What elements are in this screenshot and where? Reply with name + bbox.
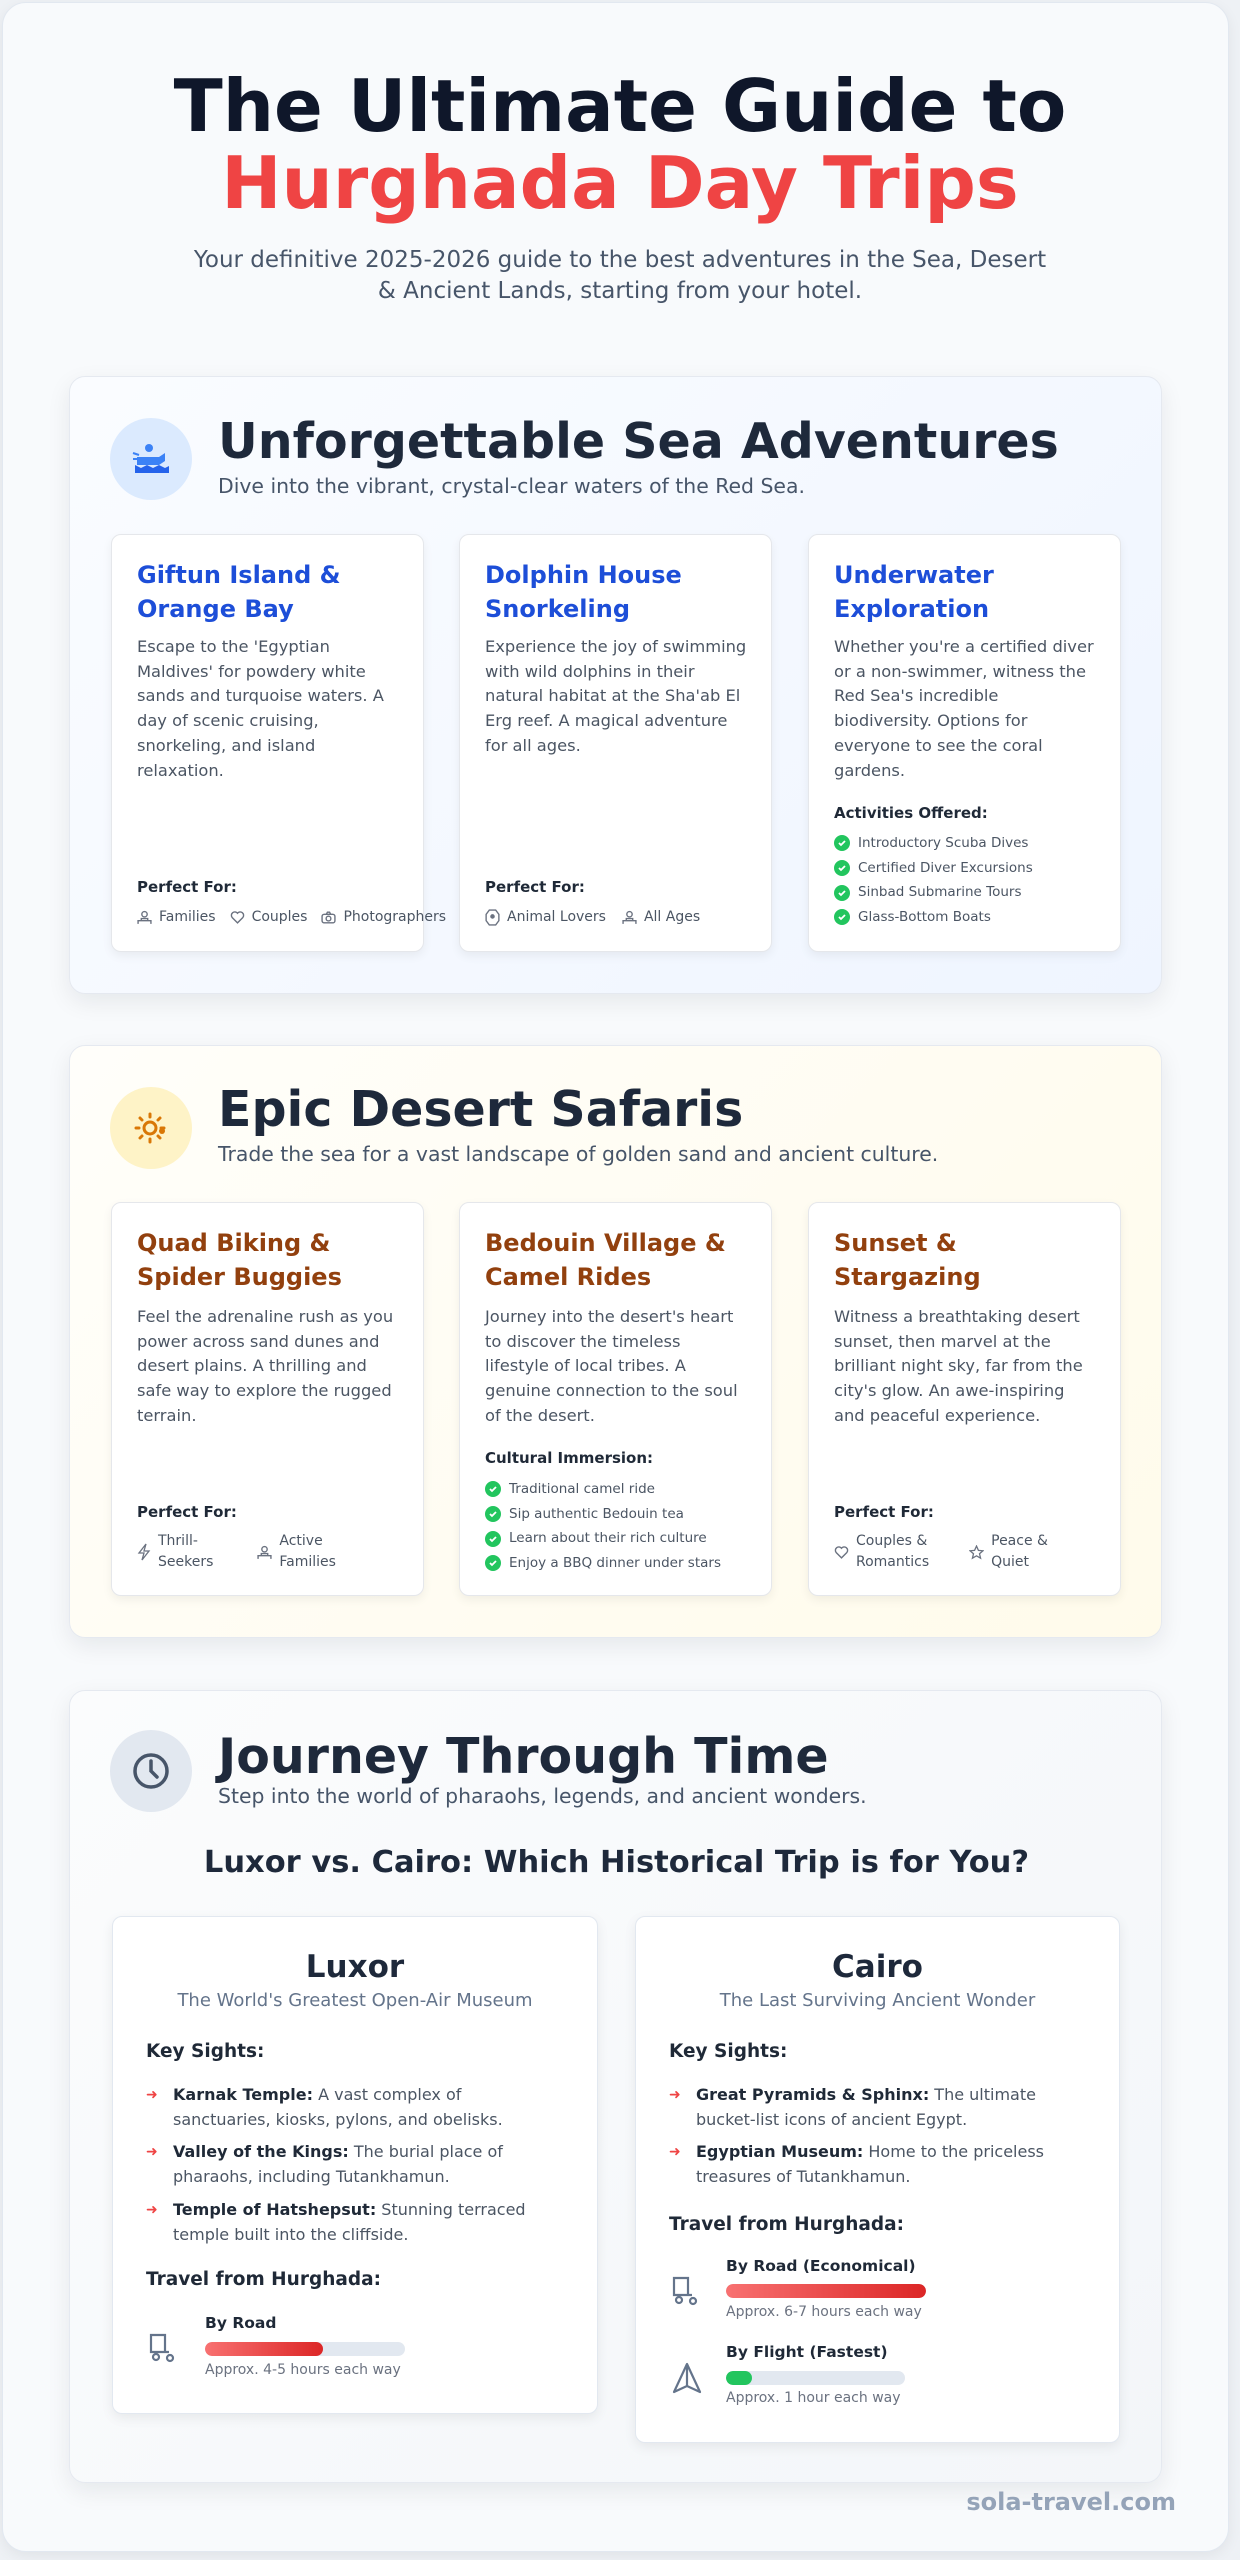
card: Sunset & Stargazing: Quiet — [991, 1554, 1029, 1570]
footer brand: sola-travel.com — [966, 2488, 1176, 2516]
sights list — [669, 2085, 1044, 2186]
travel: by road economical: Approx. 6-7 hours each way — [726, 2304, 922, 2320]
card: Luxor: Key Sights: — [146, 2041, 264, 2062]
sights list: ➜ — [146, 2144, 158, 2160]
card: Luxor: The World's Greatest Open-Air Museum — [177, 1990, 533, 2011]
heading: Unforgettable Sea Adventures — [218, 413, 1059, 470]
card: Cairo: The Last Surviving Ancient Wonder — [720, 1990, 1035, 2011]
sights list: ➜ — [669, 2144, 681, 2160]
card: Quad Biking: Feel the adrenaline rush as you power across sand dunes and desert plains. A thrilling and safe way to explore the rugged terrain. — [137, 1307, 393, 1425]
card: Cairo: Travel from Hurghada: — [669, 2214, 904, 2235]
card: Sunset & Stargazing: Sunset & Stargazing — [834, 1229, 981, 1291]
title: Hurghada Day Trips — [221, 141, 1019, 225]
card: Sunset & Stargazing: Witness a breathtaking desert sunset, then marvel at the brilliant night sky, far from the city's glow. An awe-inspiring — [834, 1307, 1083, 1400]
section subtitle: Dive into the vibrant, crystal-clear waters of the Red Sea. — [218, 474, 805, 498]
activities list: Sinbad Submarine Tours — [858, 884, 1022, 900]
title: The Ultimate Guide to — [174, 64, 1066, 148]
card: Sunset & Stargazing: Romantics — [856, 1554, 929, 1570]
card: Bedouin Village: Journey into the desert's heart to discover the timeless — [485, 1307, 733, 1351]
sights list: sanctuaries, kiosks, pylons, and obelisks. — [173, 2110, 503, 2128]
card: Underwater Exploration: biodiversity. Options for everyone to see the coral gardens. — [834, 711, 1043, 780]
card: Giftun Island: Escape to the 'Egyptian Maldives' for powdery white sands and turquoise waters. A day of scenic cruising, snorkeling, and island relaxation. — [137, 637, 384, 780]
card: Underwater Exploration — [808, 534, 1121, 952]
sights list: treasures of Tutankhamun. — [696, 2166, 910, 2186]
title — [174, 64, 1066, 225]
card: Dolphin House: All Ages — [644, 909, 700, 925]
sights list — [146, 2085, 526, 2244]
travel: by road: By Road — [205, 2314, 276, 2332]
activities list: Glass-Bottom Boats — [858, 909, 991, 925]
card: Quad Biking: Seekers — [158, 1554, 213, 1570]
card: Underwater Exploration: Underwater Exploration — [834, 561, 994, 623]
card: Giftun Island: Perfect For: — [137, 878, 237, 896]
heading: Epic Desert Safaris — [218, 1081, 743, 1138]
card: Bedouin Village: Bedouin Village & Camel Rides — [485, 1229, 726, 1291]
icon: clock — [110, 1730, 192, 1812]
card: Sunset & Stargazing: Perfect For: — [834, 1503, 934, 1521]
card: Bedouin Village: lifestyle of local tribes. A genuine connection to the soul of the desert. — [485, 1356, 738, 1425]
card: Cairo: Key Sights: — [669, 2041, 787, 2062]
sights list: temple built into the cliffside. — [173, 2224, 408, 2244]
card: Giftun Island: Families — [159, 909, 216, 925]
card: Giftun Island: Couples — [252, 909, 307, 925]
panel: journey through time — [69, 1690, 1162, 2483]
card: Quad Biking: Families — [279, 1554, 336, 1570]
card: Dolphin House — [459, 534, 772, 952]
subtitle: & Ancient Lands, starting from your hotel. — [378, 278, 862, 304]
travel: by road — [150, 2314, 405, 2378]
card: Quad Biking: Quad Biking & Spider Buggies — [137, 1229, 342, 1291]
travel: by road: Approx. 4-5 hours each way — [205, 2362, 401, 2378]
card: Giftun Island: Giftun Island & Orange Bay — [137, 561, 341, 623]
card: Dolphin House: Animal Lovers — [507, 909, 606, 925]
card: Luxor: Luxor — [306, 1949, 404, 1985]
sights list: pharaohs, including Tutankhamun. — [173, 2166, 450, 2186]
card: Cairo — [635, 1916, 1120, 2443]
sights list: Temple of Hatshepsut: Stunning terraced — [173, 2200, 526, 2219]
card: Sunset & Stargazing: and peaceful experience. — [834, 1406, 1040, 1425]
sights list: ➜ — [146, 2087, 158, 2103]
card: Giftun Island — [111, 534, 424, 952]
travel: by flight: Approx. 1 hour each way — [726, 2390, 901, 2406]
icon: swimmer — [110, 418, 192, 500]
subtitle: Your definitive 2025-2026 guide to the best adventures in the Sea, Desert — [194, 247, 1046, 273]
card: Dolphin House: Experience the joy of swimming with wild dolphins in their natural habitat at the Sha'ab El Erg reef. A magical adventure for all ages. — [485, 637, 746, 755]
card: Sunset & Stargazing: Peace & — [991, 1533, 1048, 1549]
card: Quad Biking — [111, 1202, 424, 1596]
card: Quad Biking: Active — [279, 1533, 323, 1549]
travel: by road economical: By Road (Economical) — [726, 2257, 916, 2275]
sights list: Valley of the Kings: The burial place of — [173, 2142, 503, 2161]
travel: by road economical — [672, 2257, 926, 2320]
card: Sunset & Stargazing — [808, 1202, 1121, 1596]
sights list: Egyptian Museum: Home to the priceless — [696, 2142, 1044, 2161]
activities list — [834, 835, 1033, 925]
section subtitle: Step into the world of pharaohs, legends, and ancient wonders. — [218, 1784, 867, 1808]
section subtitle: Trade the sea for a vast landscape of golden sand and ancient culture. — [218, 1142, 938, 1166]
sights list: Karnak Temple: A vast complex of — [173, 2085, 461, 2104]
icon: sun — [110, 1087, 192, 1169]
card: Bedouin Village: Cultural Immersion: — [485, 1449, 653, 1467]
comparison title: Luxor vs. Cairo: Which Historical Trip is for You? — [204, 1845, 1029, 1880]
card: Dolphin House: Dolphin House Snorkeling — [485, 561, 682, 623]
panel: desert safaris — [69, 1045, 1162, 1638]
travel: by flight: By Flight (Fastest) — [726, 2343, 888, 2361]
sights list: ➜ — [146, 2202, 158, 2218]
card: Quad Biking: Thrill- — [158, 1533, 198, 1549]
cultural list: Enjoy a BBQ dinner under stars — [509, 1555, 721, 1571]
sights list: Great Pyramids & Sphinx: The ultimate — [696, 2085, 1036, 2104]
card: Luxor: Travel from Hurghada: — [146, 2269, 381, 2290]
cultural list — [485, 1481, 721, 1571]
cultural list: Sip authentic Bedouin tea — [509, 1506, 684, 1522]
sights list: bucket-list icons of ancient Egypt. — [696, 2110, 967, 2128]
activities list: Introductory Scuba Dives — [858, 835, 1028, 851]
card: Sunset & Stargazing: Couples & — [856, 1533, 927, 1549]
card: Giftun Island: Photographers — [343, 909, 446, 925]
cultural list: Learn about their rich culture — [509, 1530, 707, 1546]
card: Bedouin Village — [459, 1202, 772, 1596]
card: Luxor — [112, 1916, 598, 2414]
sights list: ➜ — [669, 2087, 681, 2103]
heading: Journey Through Time — [218, 1728, 829, 1785]
card: Quad Biking: Perfect For: — [137, 1503, 237, 1521]
subtitle — [194, 247, 1046, 304]
activities list: Certified Diver Excursions — [858, 860, 1033, 876]
card: Underwater Exploration: Activities Offered: — [834, 804, 988, 822]
card: Underwater Exploration: Whether you're a certified diver or a non-swimmer, witness the Red Sea's incredible — [834, 637, 1094, 705]
cultural list: Traditional camel ride — [509, 1481, 655, 1497]
panel: sea adventures — [69, 376, 1162, 994]
card: Dolphin House: Perfect For: — [485, 878, 585, 896]
card: Cairo: Cairo — [832, 1949, 923, 1985]
travel: by flight — [672, 2343, 905, 2406]
